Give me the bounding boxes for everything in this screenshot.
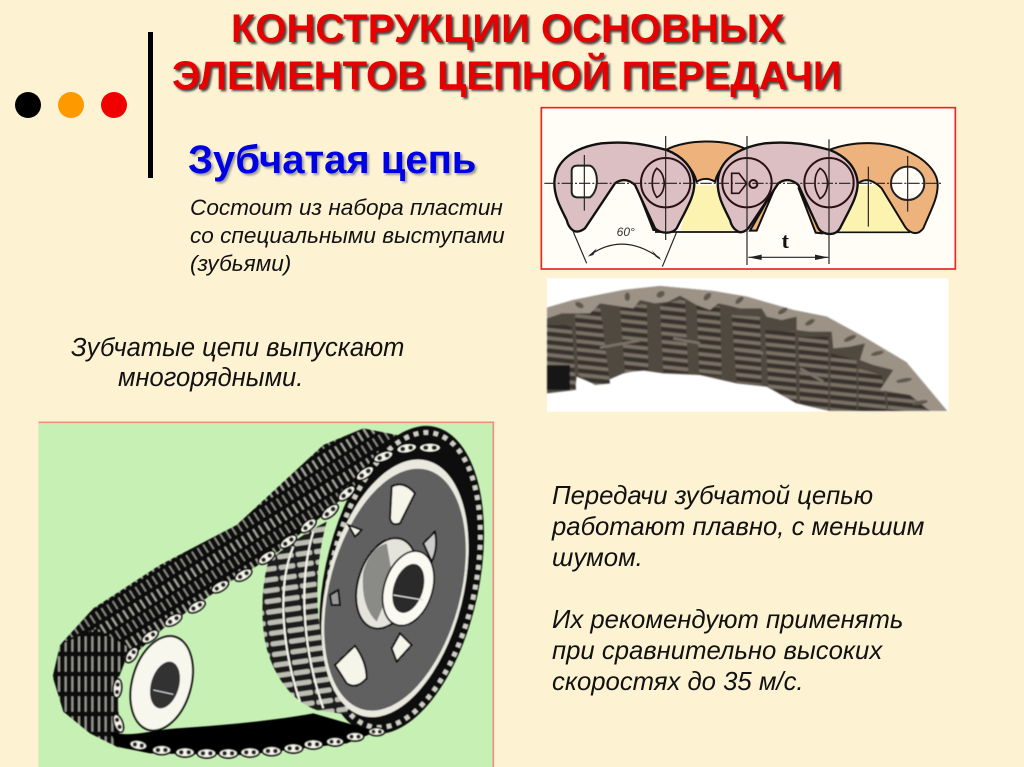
text block: chain description: (зубьями) — [190, 251, 291, 276]
text block: operation notes: Их рекомендуют применять — [552, 606, 903, 634]
sprocket rim — [293, 411, 510, 749]
text block: multi-row chains: многорядными. — [118, 364, 303, 392]
diagram: chain plate cross-section — [540, 106, 956, 270]
heading: toothed chain: Зубчатая цепь — [188, 138, 476, 182]
chain wrap at small sprocket — [53, 628, 130, 748]
photo: toothed chain — [546, 278, 948, 412]
centre and dimension lines — [544, 136, 942, 267]
yellow link sections — [680, 185, 908, 232]
text block: chain description: Состоит из набора пластин — [190, 195, 503, 220]
text block: operation notes: работают плавно, с меньшим — [552, 513, 924, 541]
chain body behind teeth — [547, 286, 930, 411]
text block: operation notes — [551, 482, 924, 696]
sprocket teeth with chain — [262, 522, 350, 715]
light side rim — [297, 444, 493, 733]
small sprocket hub — [120, 629, 203, 738]
text block: operation notes: Передачи зубчатой цепью — [552, 482, 873, 510]
sprocket web — [300, 453, 490, 726]
text block: multi-row chains — [71, 334, 404, 392]
text block: multi-row chains: Зубчатые цепи выпускают — [71, 334, 404, 362]
rung stacks — [547, 298, 928, 411]
text block: chain description — [190, 195, 505, 276]
lower dark chain — [110, 713, 377, 755]
text block: operation notes: скоростях до 35 м/с. — [552, 668, 804, 696]
title — [172, 7, 843, 101]
orange plates — [637, 142, 938, 233]
spoke windows — [330, 484, 436, 686]
title: КОНСТРУКЦИИ ОСНОВНЫХ — [231, 7, 785, 51]
upper chain band — [60, 428, 447, 675]
label: 60 degree angle: 60° — [617, 225, 635, 239]
title: ЭЛЕМЕНТОВ ЦЕПНОЙ ПЕРЕДАЧИ — [172, 54, 842, 98]
label: pitch t: t — [782, 228, 790, 253]
pivot holes — [641, 158, 854, 207]
pink plates — [554, 143, 858, 234]
text block: chain description: со специальными выступами — [190, 223, 505, 248]
text block: operation notes: шумом. — [552, 544, 643, 572]
pins — [574, 290, 928, 406]
illustration: chain drive with sprockets — [38, 422, 494, 767]
large hub — [345, 530, 428, 636]
top plate edge — [547, 286, 947, 411]
link bands — [600, 338, 823, 382]
chain links along inner edge — [111, 442, 441, 758]
icon: three bullet dots — [15, 92, 127, 118]
text block: operation notes: при сравнительно высоких — [552, 637, 882, 665]
